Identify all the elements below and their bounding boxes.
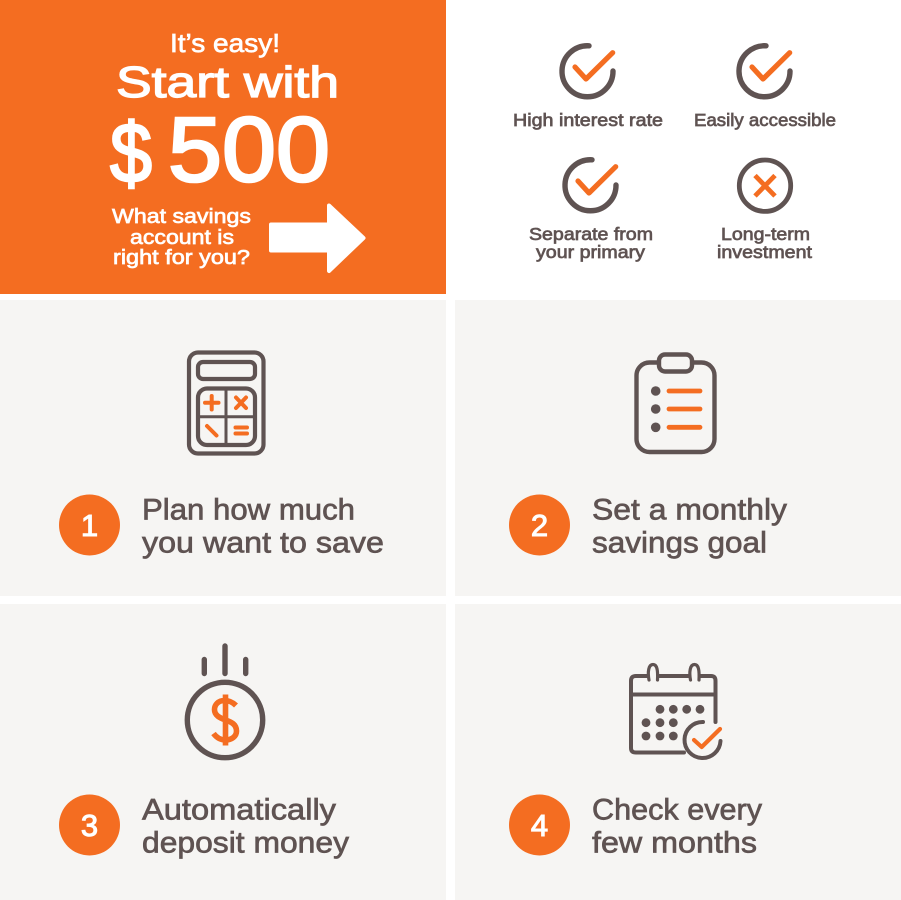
text: step 4 xyxy=(592,794,762,860)
text: step 1 xyxy=(142,494,384,560)
panel: savings account features xyxy=(513,46,836,262)
heading: Start with: Start with xyxy=(116,58,339,107)
text: step 2: Set a monthly xyxy=(592,494,787,526)
number badge 2 xyxy=(509,494,570,556)
text: step 3 xyxy=(142,794,349,860)
label: long-term investment: Long-term xyxy=(721,224,810,244)
heading: $500 amount: 500 xyxy=(168,99,330,201)
label: long-term investment xyxy=(717,224,812,262)
arrow: pointing right xyxy=(271,206,364,271)
text: what savings account question: account is xyxy=(130,226,234,249)
icon: check easily accessible xyxy=(739,46,790,97)
number badge 4: 4 xyxy=(531,808,548,843)
icon: cross long-term investment xyxy=(739,160,791,211)
text: step 3: deposit money xyxy=(142,826,349,860)
label: high interest rate: High interest rate xyxy=(513,110,663,130)
text: It's easy: It’s easy! xyxy=(170,28,280,58)
text: step 2 xyxy=(592,494,787,560)
text: what savings account question: What savings xyxy=(112,205,251,228)
icon: check high interest rate xyxy=(562,46,613,97)
icon: clipboard checklist xyxy=(636,354,714,452)
heading: $500 amount: $ xyxy=(110,106,152,200)
panel: step 3 deposit xyxy=(0,604,446,900)
number badge 4 xyxy=(509,794,570,856)
label: easily accessible: Easily accessible xyxy=(694,110,836,130)
panel: step 1 plan xyxy=(0,300,446,596)
text: what savings account question: right for you? xyxy=(113,246,250,269)
icon: check separate from primary xyxy=(565,160,616,211)
text: step 3: Automatically xyxy=(142,794,336,826)
number badge 3: 3 xyxy=(81,808,98,843)
number badge 1: 1 xyxy=(81,508,98,543)
text: step 4: Check every xyxy=(592,794,762,826)
label: separate from your primary xyxy=(529,224,653,262)
text: step 2: savings goal xyxy=(592,526,767,560)
label: separate from your primary: your primary xyxy=(536,242,645,262)
number badge 3 xyxy=(59,794,120,856)
label: separate from your primary: Separate from xyxy=(529,224,653,244)
number badge 2: 2 xyxy=(531,508,548,543)
text: step 4: few months xyxy=(592,826,757,860)
text: step 1: Plan how much xyxy=(142,494,355,526)
icon: calendar with check xyxy=(631,664,720,758)
panel: step 4 check xyxy=(455,604,901,900)
text: step 1: you want to save xyxy=(142,526,384,560)
panel: start with $500 hero xyxy=(0,0,446,294)
number badge 1 xyxy=(59,494,120,556)
heading: $500 amount xyxy=(110,99,330,201)
label: long-term investment: investment xyxy=(717,242,812,262)
icon: dollar coin dropping xyxy=(187,646,263,758)
text: what savings account question xyxy=(112,205,251,269)
panel: step 2 goal xyxy=(455,300,901,596)
icon: calculator xyxy=(189,352,264,454)
